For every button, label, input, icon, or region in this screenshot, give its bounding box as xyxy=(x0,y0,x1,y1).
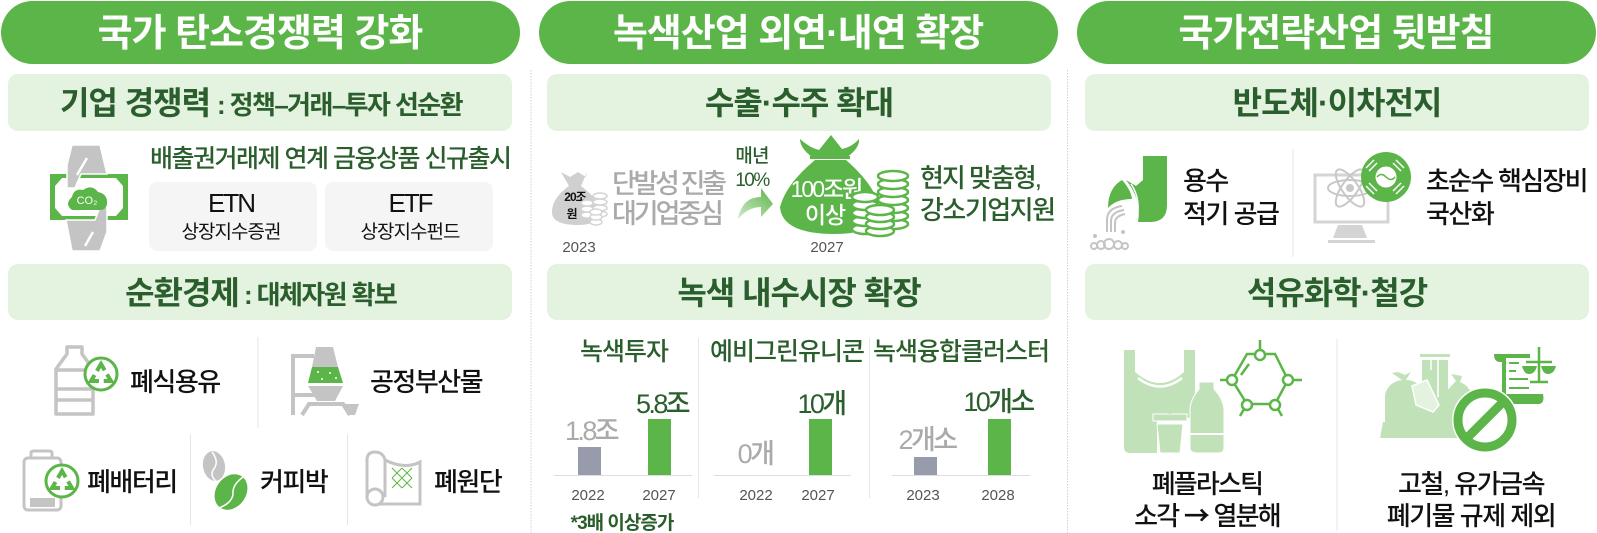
item: 공정부산물 xyxy=(293,347,483,415)
item: 폐원단: 폐원단 xyxy=(434,467,503,497)
column 3 title: 국가전략산업 뒷받침 xyxy=(1077,1,1596,64)
box: ETF xyxy=(325,182,493,251)
box: ETF: ETF xyxy=(388,188,433,218)
column 1 title: 국가 탄소경쟁력 강화 xyxy=(1,1,520,64)
chart: 예비그린유니콘: 예비그린유니콘 xyxy=(710,338,864,366)
box: ETN: 상장지수증권 xyxy=(182,221,280,243)
item: 초순수 핵심장비 국산화 xyxy=(1315,152,1587,243)
item: 공정부산물: 공정부산물 xyxy=(370,367,483,397)
heading: 순환경제: : 대체자원 확보 xyxy=(244,280,397,310)
chart: 예비그린유니콘: 10개 xyxy=(797,389,845,419)
text: 단발성 진출 대기업중심 xyxy=(612,169,727,229)
item: 고철, 유가금속 폐기물 규제 제외: 고철, 유가금속 xyxy=(1398,469,1545,499)
heading: 기업 경쟁력: 기업 경쟁력 xyxy=(60,85,210,121)
item: 폐플라스틱 소각 열분해 xyxy=(1124,340,1302,533)
text: 현지 맞춤형, 강소기업지원 xyxy=(920,163,1056,225)
item: 폐식용유: 폐식용유 xyxy=(130,367,220,397)
chart: 예비그린유니콘: 2022 xyxy=(739,487,773,504)
chart: 예비그린유니콘 xyxy=(710,338,864,504)
chart: 녹색투자: 2022 xyxy=(571,487,605,504)
chart: 녹색융합클러스터 xyxy=(873,338,1049,504)
label: 매년 10%: 매년 xyxy=(735,145,769,167)
chart: 녹색융합클러스터: 녹색융합클러스터 xyxy=(873,338,1049,366)
item: 폐원단 xyxy=(367,452,503,505)
chart: 예비그린유니콘: 2027 xyxy=(801,487,835,504)
heading: 반도체·이차전지 xyxy=(1085,74,1589,131)
icon: grey money bag 2023 xyxy=(552,172,607,225)
text: 단발성 진출 대기업중심: 단발성 진출 xyxy=(612,169,727,199)
text: 단발성 진출 대기업중심: 대기업중심 xyxy=(612,199,724,229)
label: 매년 10% xyxy=(735,145,770,191)
chart: 녹색융합클러스터: 2023 xyxy=(906,487,940,504)
item: 커피박: 커피박 xyxy=(260,467,329,497)
column 2 title: 녹색산업 외연·내연 확장 xyxy=(539,1,1058,64)
column 3 title: 국가전략산업 뒷받침: 국가전략산업 뒷받침 xyxy=(1178,13,1494,55)
box: ETN xyxy=(149,182,317,251)
item: 초순수 핵심장비 국산화: 국산화 xyxy=(1426,199,1495,229)
item: 용수 적기 공급 xyxy=(1091,156,1279,249)
item: 용수 적기 공급: 용수 xyxy=(1183,166,1228,196)
icon: grey money bag 2023: 20조 xyxy=(564,190,587,204)
heading: 기업 경쟁력: : 정책–거래–투자 선순환 xyxy=(217,90,464,120)
column 1 title: 국가 탄소경쟁력 강화: 국가 탄소경쟁력 강화 xyxy=(98,13,422,55)
chart: 녹색융합클러스터: 2개소 xyxy=(899,425,957,455)
chart: 녹색융합클러스터: 2028 xyxy=(981,487,1015,504)
text: 배출권거래제 연계 금융상품 신규출시: 배출권거래제 연계 금융상품 신규출시 xyxy=(150,145,512,173)
item: 커피박 xyxy=(201,449,329,516)
chart: 예비그린유니콘: 0개 xyxy=(738,439,773,469)
box: ETF: 상장지수펀드 xyxy=(361,221,460,243)
chart: 녹색투자: 녹색투자 xyxy=(580,338,669,366)
label: 매년 10%: 10% xyxy=(735,170,770,191)
item: 폐배터리: 폐배터리 xyxy=(87,467,177,497)
heading: 기업 경쟁력 xyxy=(8,74,512,131)
arrow xyxy=(738,188,773,219)
item: 폐배터리 xyxy=(24,451,177,510)
heading: 수출·수주 확대 xyxy=(547,74,1051,131)
heading: 석유화학·철강 xyxy=(1085,264,1589,320)
heading: 수출·수주 확대: 수출·수주 확대 xyxy=(705,85,893,121)
chart: 녹색투자 xyxy=(554,338,692,504)
chart: 녹색융합클러스터: 10개소 xyxy=(963,387,1034,417)
item: 폐플라스틱 소각 열분해: 폐플라스틱 xyxy=(1152,469,1262,499)
chart: 녹색투자: 5.8조 xyxy=(636,389,690,419)
year 2023: 2023 xyxy=(562,239,596,256)
icon: green money bag 2027: 이상 xyxy=(805,202,846,228)
text: 현지 맞춤형, 강소기업지원: 현지 맞춤형, xyxy=(920,163,1042,193)
icon: carbon credit exchange: CO₂ xyxy=(77,195,97,207)
chart: 녹색투자: 2027 xyxy=(642,487,676,504)
item: 용수 적기 공급: 적기 공급 xyxy=(1183,199,1279,229)
heading: 순환경제: 순환경제 xyxy=(125,275,239,311)
item: 폐플라스틱 소각 열분해: 소각 → 열분해 xyxy=(1134,496,1280,533)
icon: grey money bag 2023: 원 xyxy=(566,207,578,221)
box: ETN: ETN xyxy=(208,188,254,218)
icon: green money bag 2027 xyxy=(780,135,908,236)
item: 고철, 유가금속 폐기물 규제 제외: 폐기물 규제 제외 xyxy=(1387,501,1555,531)
item: 초순수 핵심장비 국산화: 초순수 핵심장비 xyxy=(1426,166,1587,196)
icon: carbon credit exchange xyxy=(50,145,128,251)
text: 현지 맞춤형, 강소기업지원: 강소기업지원 xyxy=(920,195,1056,225)
heading: 녹색 내수시장 확장: 녹색 내수시장 확장 xyxy=(677,275,921,311)
heading: 녹색 내수시장 확장 xyxy=(547,264,1051,320)
chart: 녹색투자: 1.8조 xyxy=(565,416,619,446)
column 2 title: 녹색산업 외연·내연 확장: 녹색산업 외연·내연 확장 xyxy=(613,13,983,55)
item: 폐식용유 xyxy=(56,347,220,414)
heading: 순환경제 xyxy=(8,264,512,320)
item: 고철, 유가금속 폐기물 규제 제외 xyxy=(1380,347,1556,531)
icon: green money bag 2027: 100조원 xyxy=(791,176,861,202)
heading: 석유화학·철강: 석유화학·철강 xyxy=(1247,275,1428,311)
heading: 반도체·이차전지: 반도체·이차전지 xyxy=(1233,85,1441,121)
year 2027: 2027 xyxy=(810,239,844,256)
